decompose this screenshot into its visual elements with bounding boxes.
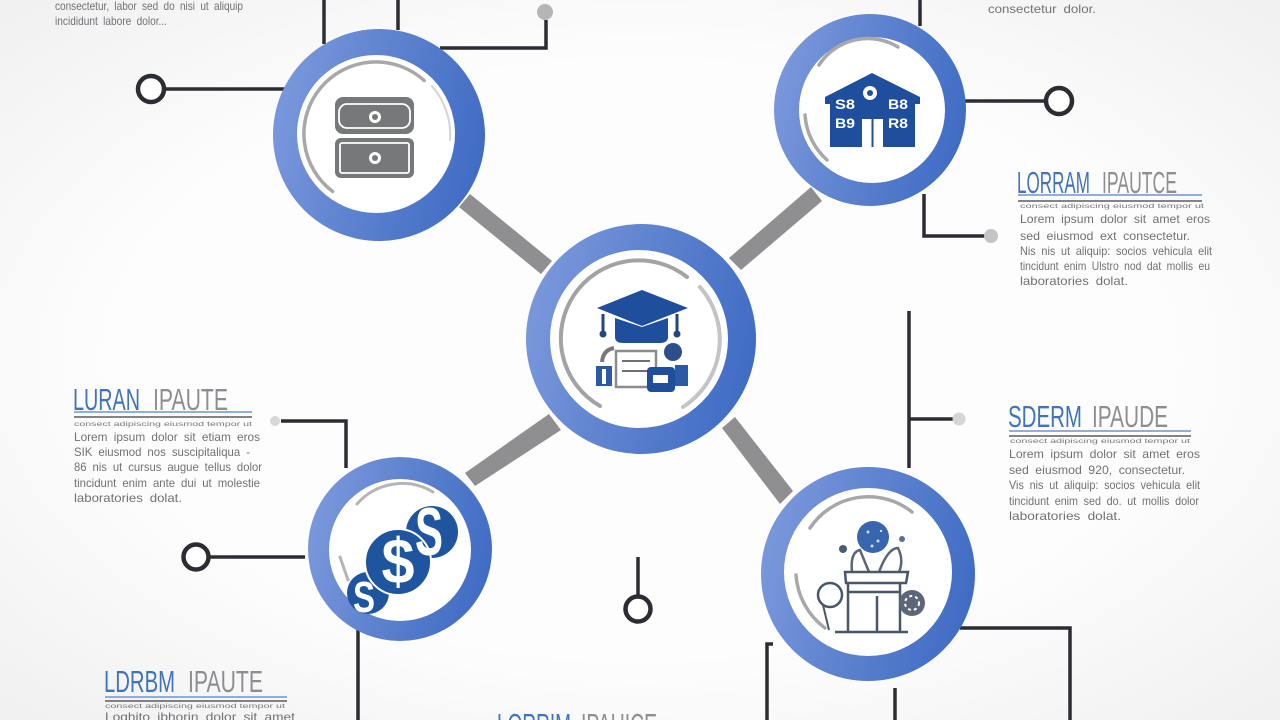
progress arcs — [340, 483, 433, 580]
connector node: left grey dot — [270, 416, 280, 426]
connector node: bottom centre ring — [626, 596, 650, 622]
connector node: right middle grey dot — [952, 412, 966, 426]
connector node: top-left ring — [138, 76, 164, 102]
text block: upper right: Nis nis ut aliquip: socios vehicula elit — [1020, 244, 1213, 258]
heading: LORRAM — [1017, 165, 1090, 200]
text block: top left fragment: incididunt labore dolor... — [55, 14, 167, 28]
icon: house — [825, 73, 920, 147]
text block: left: tincidunt enim ante dui ut molestie — [74, 476, 260, 490]
text block: left: 86 nis ut cursus augue tellus dolor — [74, 460, 262, 474]
connector node: lower-left ring — [184, 544, 208, 570]
text block: upper right — [1017, 165, 1213, 288]
icon: dollar coins: $ — [382, 525, 414, 597]
grey spoke: upper left — [459, 194, 552, 274]
text block: upper right: sed eiusmod ext consectetur. — [1020, 229, 1190, 243]
heading — [104, 664, 263, 699]
text block: lower right: Lorem ipsum dolor sit amet eros — [1009, 447, 1200, 461]
icon: dollar coins: S — [353, 573, 375, 622]
icon: house: B8 — [888, 96, 908, 112]
heading: LDRBM — [104, 664, 175, 699]
connector node: top-right ring — [1046, 88, 1072, 114]
text block: left: laboratories dolat. — [74, 491, 182, 505]
text block: left — [73, 382, 262, 505]
progress arcs — [304, 62, 450, 192]
text block: top left fragment — [55, 0, 243, 28]
connector node: top grey dot — [537, 4, 553, 20]
grey spoke: lower right — [722, 417, 793, 504]
text block: left: Lorem ipsum dolor sit etiam eros — [74, 430, 260, 444]
icon: graduation cap and supplies — [596, 290, 688, 392]
heading: IPAUTCE — [1102, 165, 1177, 200]
grey spoke: upper right — [729, 187, 822, 270]
heading — [73, 382, 228, 417]
text block: upper right: laboratories dolat. — [1020, 274, 1128, 288]
heading: IPAUTE — [153, 382, 228, 417]
heading — [1008, 399, 1168, 434]
connector node: right grey dot — [984, 229, 998, 243]
connector lines: bottom centre — [636, 557, 640, 596]
progress arcs — [796, 497, 912, 628]
heading: SDERM — [1008, 399, 1082, 434]
text block: lower right — [1008, 399, 1201, 523]
icon: drawers — [335, 97, 414, 178]
icon: dollar coins — [347, 494, 458, 622]
node: lower-right monument — [761, 467, 975, 681]
progress arcs — [561, 260, 720, 407]
text block: left: SIK eiusmod nos suscipitaliqua - — [74, 445, 250, 459]
icon: house: B9 — [835, 115, 855, 131]
text block: upper right: Lorem ipsum dolor sit amet eros — [1020, 212, 1210, 226]
icon: house: S8 — [835, 96, 855, 112]
node: top-left drawers — [273, 29, 485, 241]
text block: left: consect adipiscing eiusmod tempor ut — [74, 422, 253, 428]
text block: lower right: sed eiusmod 920, consectetur. — [1009, 463, 1185, 477]
text block: bottom left: consect adipiscing eiusmod tempor ut — [105, 704, 286, 710]
text block: lower right: Vis nis ut aliquip: socios vehicula elit — [1009, 478, 1201, 492]
text block: lower right: tincidunt enim sed do. ut mollis dolor — [1009, 494, 1199, 508]
icon: house: R8 — [888, 115, 908, 131]
heading: IPAUDE — [1092, 399, 1168, 434]
text block: upper right: tincidunt enim Ulstro nod dat mollis eu — [1020, 259, 1210, 273]
text block: upper right: consect adipiscing eiusmod tempor ut — [1020, 204, 1205, 210]
connector lines: top-left node — [165, 0, 546, 89]
heading: LURAN — [73, 382, 140, 417]
text block: lower right: laboratories dolat. — [1009, 509, 1121, 523]
connector lines: left middle — [210, 421, 358, 720]
text block: lower right: consect adipiscing eiusmod tempor ut — [1010, 439, 1191, 445]
grey spoke: lower left — [465, 414, 561, 486]
node: lower-left dollars — [308, 457, 492, 641]
text block: top right fragment: consectetur dolor. — [988, 2, 1096, 16]
progress arcs — [805, 38, 898, 160]
connector lines: top-right node — [920, 0, 1045, 236]
node: top-right school house — [774, 14, 966, 206]
connector lines: bottom right — [767, 628, 1070, 720]
icon: dollar coins: S — [415, 494, 443, 570]
heading: IPAUTE — [188, 664, 263, 699]
icon: monument with tree — [818, 521, 925, 632]
node: centre graduation — [526, 224, 756, 454]
connector lines: right middle — [909, 311, 953, 468]
text block: bottom left — [104, 664, 296, 720]
